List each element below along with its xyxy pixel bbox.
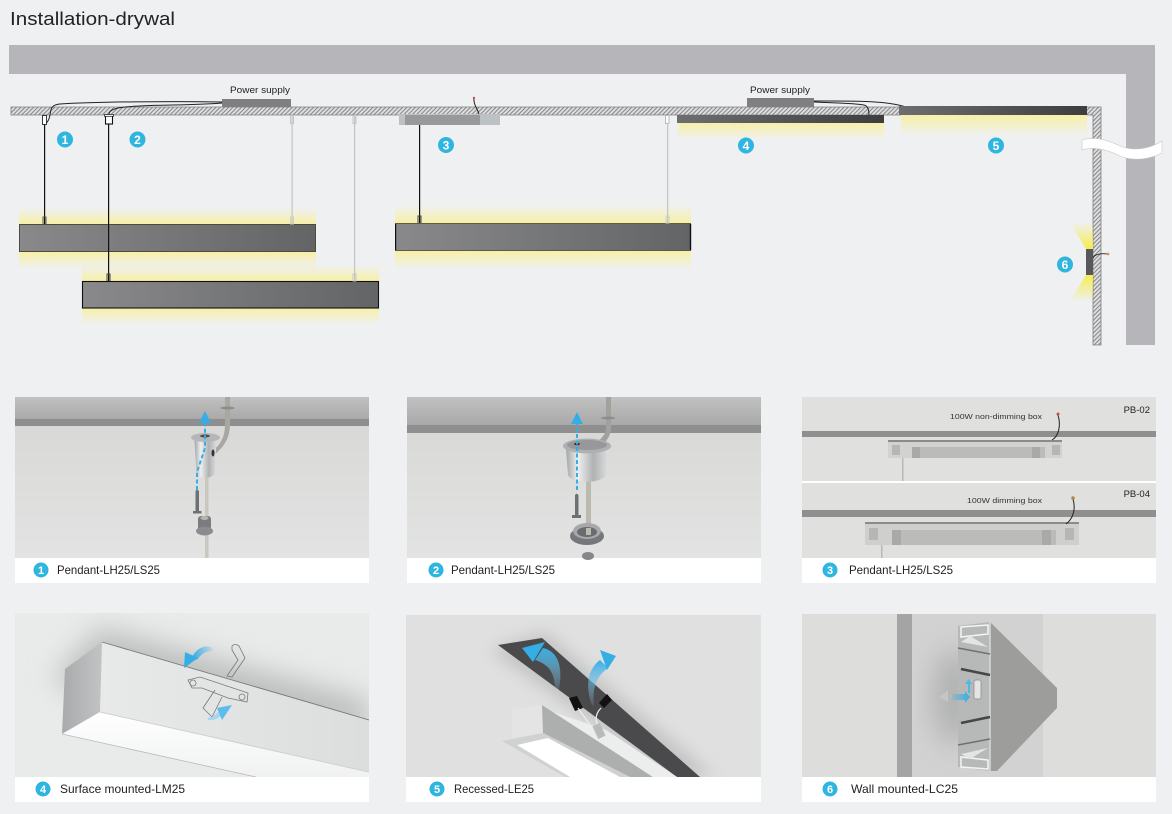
rotate arrows: [184, 646, 232, 720]
panel 3: power boxes: [802, 397, 1156, 583]
marker 4: 4: [743, 139, 750, 153]
marker 2: 2: [134, 133, 141, 147]
caption: 6: [827, 784, 833, 796]
caption: Wall mounted-LC25: [851, 782, 958, 796]
pendant light 2: [82, 114, 379, 325]
wiring from right power supply: [814, 101, 906, 115]
caption: Pendant-LH25/LS25: [849, 563, 953, 577]
lock nut: [196, 516, 213, 536]
marker 6: [1057, 256, 1073, 272]
canopy and cable: [563, 397, 615, 532]
caption: 2: [433, 565, 439, 577]
wall break mark: [1082, 138, 1162, 159]
caption: 4: [40, 784, 47, 796]
marker 4: [738, 138, 754, 154]
wall light 6: [1070, 222, 1109, 302]
title: Installation-drywal: [10, 9, 175, 29]
screw cone: [939, 690, 948, 702]
number markers: [57, 132, 1073, 272]
caption: 1: [38, 565, 44, 577]
blue dashed arrow: [571, 412, 583, 490]
box PB-04: 100W dimming box: [967, 496, 1042, 505]
marker 3: 3: [443, 138, 450, 152]
caption: Pendant-LH25/LS25: [451, 563, 555, 577]
wiring from left power supply: [46, 102, 222, 123]
caption: 5: [434, 784, 440, 796]
drywall ceiling and side wall: [11, 107, 1101, 345]
surface mounted light 4: [677, 115, 884, 140]
pendant light 3: [395, 115, 691, 270]
panel 6: wall mounted: [802, 614, 1156, 802]
box PB-02: [802, 397, 1156, 481]
caption: Recessed-LE25: [454, 782, 534, 796]
marker 1: [57, 132, 73, 148]
marker 2: [130, 132, 146, 148]
ceiling slot: [490, 632, 715, 777]
box PB-04: [802, 483, 1156, 558]
caption: [430, 782, 534, 796]
panel 2: pendant large canopy: [407, 397, 761, 583]
box PB-02: PB-02: [1124, 405, 1150, 416]
box PB-02: 100W non-dimming box: [950, 412, 1042, 421]
power supply right: [747, 85, 814, 107]
panel 4: surface mounted: [15, 613, 369, 802]
caption: Pendant-LH25/LS25: [57, 563, 160, 577]
screw: [193, 490, 202, 514]
wall: [897, 614, 1043, 777]
power box 3: [399, 97, 500, 125]
outer building wall and slab: [9, 45, 1155, 345]
screw: [572, 494, 581, 518]
panel 1: pendant small canopy: [15, 397, 369, 583]
box PB-04: PB-04: [1124, 489, 1150, 500]
canopy and cable: [191, 397, 234, 558]
marker 5: 5: [993, 139, 1000, 153]
power supply left: [222, 85, 291, 107]
mounting clip: [188, 644, 248, 717]
power supply left: Power supply: [230, 85, 291, 95]
marker 5: [988, 138, 1004, 154]
recessed light 5: [899, 106, 1087, 136]
pendant light 1: [19, 115, 316, 269]
caption: Surface mounted-LM25: [60, 782, 185, 796]
installation diagram: [9, 45, 1162, 345]
lamp profile: [958, 622, 1057, 771]
marker 1: 1: [62, 133, 69, 147]
caption: 3: [827, 565, 833, 577]
spring clips: [569, 694, 612, 739]
power supply right: Power supply: [750, 85, 811, 95]
marker 3: [438, 137, 454, 153]
ring base: [570, 523, 604, 560]
ceiling shadow: [52, 628, 369, 735]
blue dashed arrow: [197, 411, 211, 490]
lamp body: [62, 642, 369, 777]
lift arrows: [522, 642, 616, 705]
recessed lamp: [502, 705, 677, 777]
marker 6: 6: [1062, 258, 1069, 272]
blue arrows: [952, 679, 972, 703]
panel 5: recessed: [406, 615, 761, 802]
